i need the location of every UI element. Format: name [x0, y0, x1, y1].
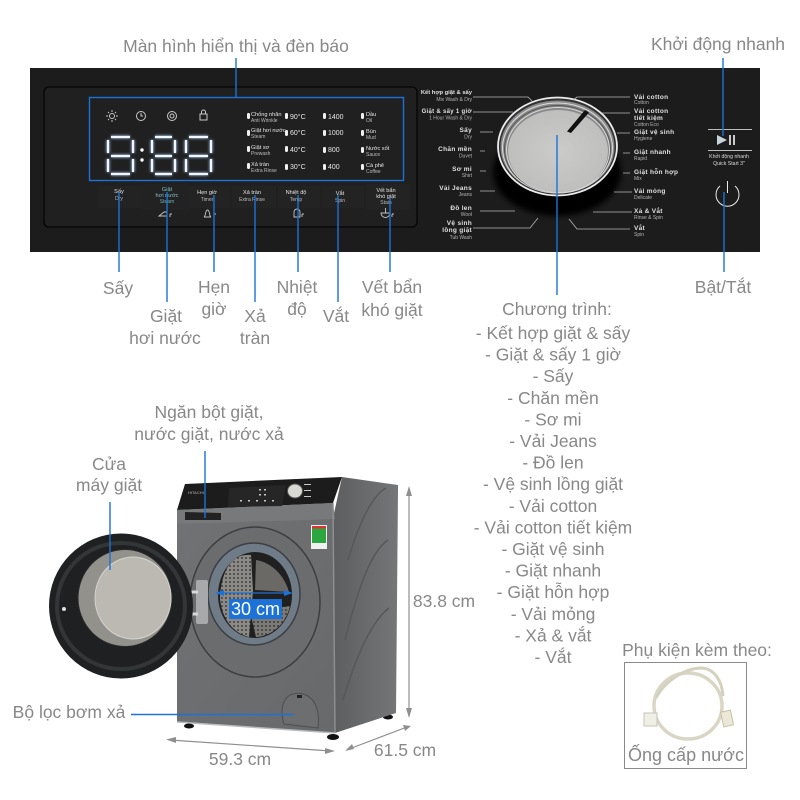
dial leader lines	[473, 97, 632, 229]
indicator lights and options: 30°C	[290, 163, 306, 171]
control top	[177, 477, 342, 510]
annotation: Vắt: Vắt	[323, 305, 349, 326]
annotation: door: Cửa	[92, 454, 126, 474]
base	[177, 722, 335, 733]
annotation: Vết bẩn khó giặt	[361, 198, 423, 320]
buttons row: Vắt	[336, 190, 345, 197]
dial labels right: Vải mỏng	[634, 188, 666, 195]
dial labels right: Mix	[634, 176, 642, 182]
annotation: Vết bẩn khó giặt: khó giặt	[361, 300, 423, 320]
buttons row	[98, 184, 410, 218]
buttons row: khó giặt	[376, 194, 396, 200]
indicator lights and options: Cà phê	[366, 163, 384, 169]
indicator lights and options: 1000	[328, 130, 344, 137]
dial labels left: Đồ len	[450, 203, 472, 212]
dial labels left: Duvet	[459, 154, 473, 160]
annotation: Vết bẩn khó giặt: Vết bẩn	[362, 277, 422, 297]
annotation: Sấy	[103, 192, 133, 298]
annotation: Vắt	[323, 195, 349, 326]
indicator lights and options: Oil	[366, 118, 372, 124]
dial labels right: Giặt vệ sinh	[634, 129, 674, 136]
buttons row: Spin	[335, 198, 345, 204]
annotation: program list: - Sấy	[533, 366, 574, 386]
power button	[716, 181, 739, 206]
annotation: Giặt hơi nước: Giặt	[150, 306, 182, 326]
dial labels right	[634, 94, 678, 238]
annotation: program list: - Kết hợp giặt & sấy	[476, 323, 630, 343]
annotation: power	[695, 192, 751, 297]
dial labels right: Cotton	[634, 100, 649, 106]
dial labels left: Chăn mền	[438, 144, 472, 153]
annotation: drain pump filter: Bộ lọc bơm xả	[13, 702, 126, 722]
annotation: program list: - Giặt & sấy 1 giờ	[485, 345, 621, 365]
drain filter cover	[282, 693, 319, 728]
quick start button: Quick Start 3"	[713, 161, 745, 167]
buttons row: Nhiệt độ	[286, 190, 306, 196]
dimension: height: 83.8 cm	[413, 591, 475, 611]
dial labels right: Rapid	[634, 156, 647, 162]
dial labels right: Xả & Vắt	[634, 206, 663, 215]
annotation: program list: - Vệ sinh lồng giặt	[483, 474, 623, 494]
digital display 8:88	[108, 137, 211, 174]
indicator lights and options: 60°C	[290, 129, 306, 137]
open door	[49, 534, 193, 678]
annotation: program list: - Đồ len	[522, 453, 584, 473]
dial shadow	[493, 128, 621, 216]
annotation: program list: - Giặt hỗn hợp	[497, 581, 609, 602]
buttons row: Steam	[160, 199, 174, 205]
dial labels left: Vệ sinh	[447, 220, 472, 227]
dial labels left: Shirt	[462, 173, 473, 179]
annotation: program list: - Giặt vệ sinh	[501, 539, 605, 559]
dial labels left: Jeans	[459, 192, 472, 198]
display housing	[44, 87, 417, 227]
indicator lights and options: Coffee	[366, 169, 381, 175]
dimension: width: 59.3 cm	[209, 749, 271, 769]
annotation: display and indicators: Màn hình hiển thị và đèn báo	[123, 36, 349, 56]
annotation: program list: Chương trình:	[502, 299, 612, 319]
accessories: Ống cấp nước	[628, 744, 744, 765]
annotation: program list: - Vải Jeans	[509, 431, 597, 451]
annotation: detergent drawer	[134, 402, 284, 518]
dimension: depth: 61.5 cm	[374, 740, 436, 760]
dial labels right: Spin	[634, 232, 644, 238]
annotation: Giặt hơi nước	[129, 192, 201, 348]
energy label	[311, 525, 327, 549]
dial labels left: Wool	[461, 212, 472, 218]
dial labels right: Hygiene	[634, 136, 653, 142]
dial labels left	[421, 89, 473, 241]
dimension: height	[406, 486, 475, 718]
buttons row: Xả tràn	[243, 190, 261, 196]
dial labels right: Delicate	[634, 195, 652, 201]
annotation: program list: - Vải cotton	[509, 496, 597, 516]
buttons row: Stain	[380, 200, 392, 206]
hose	[644, 668, 734, 739]
dimension: width	[166, 737, 335, 769]
dial labels right: Cotton Eco	[634, 122, 659, 128]
quick start button: Khởi động nhanh	[709, 153, 749, 160]
annotation: program list: - Chăn mền	[507, 388, 599, 408]
door opening	[190, 527, 320, 677]
buttons row: Giặt	[162, 187, 173, 193]
indicator lights and options: Prewash	[251, 151, 271, 157]
annotation: drum diameter 30 cm: 30 cm	[231, 599, 280, 619]
buttons row: Dry	[115, 196, 123, 202]
side panel	[333, 477, 398, 733]
annotation: door	[76, 454, 142, 570]
machine feet	[184, 714, 393, 740]
status icons	[106, 110, 207, 122]
dial labels right: Rinse & Spin	[634, 215, 663, 221]
annotation: program list: - Xả & vắt	[515, 624, 592, 645]
buttons row: Extra Rinse	[239, 197, 265, 203]
dial labels left: Dry	[464, 134, 472, 140]
accessories	[622, 640, 772, 768]
annotation: Hẹn giờ: giờ	[201, 299, 227, 319]
indicator lights and options: Giặt sơ	[251, 145, 270, 151]
dial labels right: Vải cotton	[634, 108, 668, 115]
indicator lights and options: Extra Rinse	[251, 168, 277, 174]
indicator lights and options: 40°C	[290, 146, 306, 154]
dial labels right: Giặt hỗn hợp	[634, 167, 678, 176]
annotation: door: máy giặt	[76, 475, 142, 495]
washing machine: HITACHI	[188, 490, 204, 495]
buttons row: Hẹn giờ	[197, 190, 217, 196]
buttons row: Timer	[201, 197, 214, 203]
annotation: Nhiệt độ: độ	[287, 299, 307, 319]
annotation: detergent drawer: Ngăn bột giặt,	[155, 402, 263, 422]
dial labels right: Vắt	[634, 223, 646, 232]
buttons row: Vết bẩn	[376, 187, 396, 194]
indicator lights and options: 90°C	[290, 113, 306, 121]
annotation: power: Bật/Tắt	[695, 276, 751, 297]
detergent drawer	[185, 512, 221, 520]
panel: control panel	[30, 68, 760, 252]
indicator lights and options: 1400	[328, 114, 344, 121]
dial labels left: Giặt & sấy 1 giờ	[422, 108, 472, 115]
dial labels right: Giặt nhanh	[634, 149, 671, 156]
washing machine	[177, 477, 398, 740]
annotation: program list	[474, 135, 632, 667]
annotation: program list: - Giặt nhanh	[505, 561, 601, 581]
dial labels left: Tub Wash	[450, 235, 472, 241]
annotation: program list: - Vải mỏng	[511, 604, 595, 624]
annotation: Sấy: Sấy	[103, 278, 133, 298]
drum interior	[220, 555, 253, 637]
program dial	[498, 98, 617, 196]
annotation: Hẹn giờ	[198, 195, 230, 319]
buttons row: hơi nước	[156, 193, 179, 199]
annotation: Giặt hơi nước: hơi nước	[129, 328, 201, 348]
dial labels left: Kết hợp giặt & sấy	[421, 89, 473, 96]
accessories: Phụ kiện kèm theo:	[622, 640, 772, 660]
indicator lights and options: 800	[328, 147, 340, 154]
front panel	[177, 510, 335, 733]
indicator lights and options: Sauce	[366, 152, 380, 158]
annotation: display and indicators	[90, 36, 404, 180]
indicator lights and options: Steam	[251, 134, 265, 140]
annotation: detergent drawer: nước giặt, nước xả	[134, 424, 284, 444]
annotation: Xả tràn: tràn	[240, 328, 270, 348]
quick start button	[708, 130, 752, 167]
indicator lights and options: Mud	[366, 135, 376, 141]
buttons row: Sấy	[114, 189, 124, 195]
annotation: program list: - Sơ mi	[524, 409, 582, 429]
annotation: Nhiệt độ	[277, 195, 318, 319]
indicator lights and options: Bùn	[366, 129, 376, 135]
annotation: program list: - Vắt	[535, 646, 572, 667]
indicator lights and options: Chống nhăn	[251, 112, 281, 118]
dial labels left: Sơ mi	[452, 166, 472, 173]
dial labels right: tiết kiệm	[634, 114, 663, 122]
dial labels left: Sấy	[460, 126, 472, 134]
machine dial	[288, 484, 302, 498]
indicator lights and options: Nước xốt	[366, 146, 390, 152]
annotation: program list: - Vải cotton tiết kiệm	[474, 517, 632, 537]
door hinges	[188, 592, 198, 614]
dial labels left: Mix Wash & Dry	[436, 97, 472, 103]
annotation: quick start: Khởi động nhanh	[651, 34, 785, 54]
annotation: Xả tràn: Xả	[244, 306, 266, 326]
indicator lights and options: Anti Wrinkle	[251, 118, 278, 124]
buttons row: Temp	[290, 197, 302, 203]
indicator lights and options	[247, 112, 390, 175]
indicator lights and options: Giặt hơi nước	[251, 128, 286, 134]
dimension: depth	[345, 725, 436, 760]
annotation: drum diameter 30 cm	[215, 590, 293, 619]
annotation: Nhiệt độ: Nhiệt	[277, 277, 318, 297]
indicator lights and options: Xả tràn	[251, 162, 269, 168]
indicator lights and options: 400	[328, 164, 340, 171]
dial labels left: 1 Hour Wash & Dry	[429, 116, 472, 122]
annotation: Hẹn giờ: Hẹn	[198, 277, 230, 297]
annotation: Xả tràn	[240, 195, 270, 348]
dial labels right: Vải cotton	[634, 94, 668, 101]
dial labels left: lồng giặt	[442, 225, 473, 234]
annotation: quick start	[651, 34, 785, 136]
dial labels left: Vải Jeans	[439, 185, 472, 192]
indicator lights and options: Dầu	[366, 112, 376, 118]
